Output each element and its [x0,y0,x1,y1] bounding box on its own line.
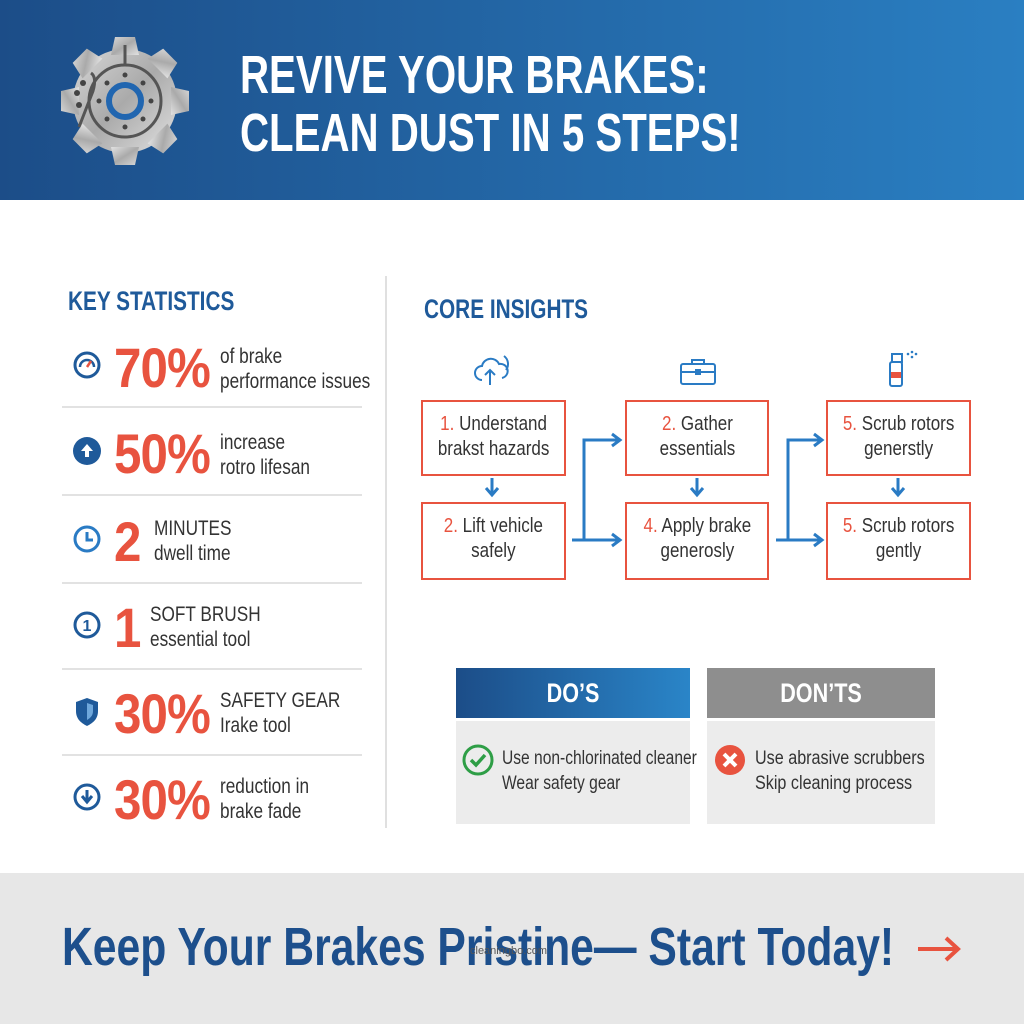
arrows [484,432,906,548]
stat 3: MINUTES [154,517,231,540]
panel: don'ts: DON’TS [780,678,862,708]
panel: do's: Use non-chlorinated cleaner [502,748,697,769]
panel: don'ts: Skip cleaning process [755,773,912,794]
stat 6 [74,768,309,831]
step 1: 1. Understand [440,413,547,435]
heading: key statistics: KEY STATISTICS [68,286,234,316]
stat 6: reduction in [220,775,309,798]
stat 5: 30% [114,682,210,745]
step 1 [421,400,566,476]
stat 5: SAFETY GEAR [220,689,340,712]
step 2 gather: essentials [659,438,735,460]
stat 4: 1 [83,618,92,635]
panel: don'ts [707,668,935,824]
icon: brake gear [61,37,189,165]
footer call to action: cleaningbo.com [470,945,547,957]
heading: core insights: CORE INSIGHTS [424,294,588,324]
step 5 scrub [826,400,971,476]
stat 4 [62,584,362,670]
icon: check [462,744,494,776]
stat 5: Irake tool [220,714,291,737]
icon: toolbox [680,359,716,385]
stat 3: dwell time [154,542,231,565]
step 2 gather [625,400,769,476]
title: REVIVE YOUR BRAKES: [240,45,709,105]
step 4: 4. Apply brake [643,515,751,537]
stat 6: 30% [114,768,210,831]
step 5 gently: 5. Scrub rotors [843,515,954,537]
stat 2: increase [220,431,285,454]
stat 1: of brake [220,345,282,368]
panel: do's: Wear safety gear [502,773,620,794]
title [240,45,741,163]
step 2 lift [421,502,566,580]
stat 4: SOFT BRUSH [150,603,261,626]
step 2 lift: safely [471,540,516,562]
step 4: generosly [660,540,734,562]
stat 1 [62,324,362,408]
icon: spray bottle [889,350,918,387]
panel: key statistics [62,286,370,831]
step 5 scrub: 5. Scrub rotors [843,413,954,435]
step 2 lift: 2. Lift vehicle [444,515,543,537]
stat 3: 2 [114,510,141,573]
panel: do's [456,668,697,824]
stat 1: performance issues [220,370,370,393]
step 5 gently: gently [876,540,921,562]
stat 4: 1 [114,596,141,659]
header banner [0,0,1024,200]
stat 5 [62,670,362,756]
step 4 [625,502,769,580]
stat 4: essential tool [150,628,251,651]
icon: arrow [918,936,961,962]
stat 2: 50% [114,422,210,485]
stat 3 [62,498,362,584]
panel: core insights [421,294,971,580]
footer call to action: Keep Your Brakes Pristine— Start Today! [62,917,894,977]
stat 6: brake fade [220,800,301,823]
step 2 gather: 2. Gather [662,413,732,435]
footer call to action [0,873,1024,1024]
stat 2 [62,410,362,496]
step 5 scrub: generstly [864,438,933,460]
stat 2: rotro lifesan [220,456,310,479]
panel: don'ts: Use abrasive scrubbers [755,748,925,769]
step 1: brakst hazards [438,438,549,460]
panel: do's: DO’S [547,678,599,708]
icon: x [715,745,745,775]
stat 1: 70% [114,336,210,399]
icon: cloud [474,355,509,385]
title: CLEAN DUST IN 5 STEPS! [240,103,741,163]
step 5 gently [826,502,971,580]
